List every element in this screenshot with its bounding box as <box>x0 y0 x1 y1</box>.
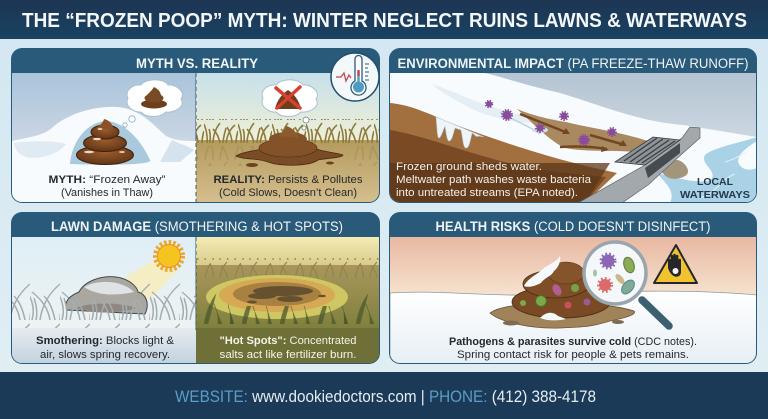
smothering caption: air, slows spring recovery. <box>40 349 170 361</box>
icon: smothering mound <box>66 277 147 314</box>
panel heading: ENVIRONMENTAL IMPACT (PA FREEZE-THAW RUNOFF) <box>398 56 749 71</box>
icon: burn patch <box>206 275 348 319</box>
winter sky <box>390 73 757 203</box>
panel: environmental impact <box>389 48 757 203</box>
reality caption: (Cold Slows, Doesn’t Clean) <box>219 187 357 199</box>
myth caption: MYTH: “Frozen Away” <box>48 174 166 186</box>
outflow from drain <box>662 160 688 179</box>
local waterways label <box>680 178 750 198</box>
local waterways label: WATERWAYS <box>680 189 750 201</box>
panel heading: LAWN DAMAGE (SMOTHERING & HOT SPOTS) <box>51 219 343 234</box>
soil caption: into untreated streams (EPA noted). <box>396 187 578 199</box>
snow ground <box>390 291 757 364</box>
local waterways label: LOCAL <box>697 176 734 188</box>
smothering scene <box>12 237 196 364</box>
icon: magnifying glass <box>584 242 669 326</box>
icon: contaminated poop <box>490 256 635 328</box>
soil caption: Frozen ground sheds water. <box>396 161 542 173</box>
dusk sky <box>390 237 757 297</box>
smothering caption: Smothering: Blocks light & <box>36 335 175 347</box>
soil caption <box>396 161 592 199</box>
reality caption: REALITY: Persists & Pollutes <box>214 174 363 186</box>
panel: lawn damage <box>11 212 380 364</box>
icon: warning hand <box>654 245 697 283</box>
soil caption: Meltwater path washes waste bacteria <box>396 174 592 186</box>
panel: health risks <box>389 212 757 364</box>
soil cross-section <box>390 103 617 203</box>
hot spots caption: "Hot Spots": Concentrated <box>220 335 356 347</box>
panel: myth vs reality <box>11 48 380 203</box>
panel heading: MYTH VS. REALITY <box>136 56 258 71</box>
myth scene <box>12 73 196 203</box>
smothering caption <box>36 335 175 361</box>
icon: large poop <box>76 119 134 164</box>
hot spots scene <box>196 237 380 364</box>
panel heading: HEALTH RISKS (COLD DOESN'T DISINFECT) <box>436 219 710 234</box>
footer banner <box>0 372 768 419</box>
icon: thermometer <box>331 53 379 101</box>
myth caption <box>48 174 166 199</box>
contact line: WEBSITE: www.dookiedoctors.com | PHONE: (412) 388-4178 <box>175 388 596 406</box>
reality caption <box>214 174 363 199</box>
hot spots caption <box>220 336 356 358</box>
icon: thought bubble with poop <box>123 80 182 127</box>
icon: sun <box>156 242 182 270</box>
reality scene <box>196 73 380 203</box>
hot spots caption: salts act like fertilizer burn. <box>220 349 356 361</box>
myth caption: (Vanishes in Thaw) <box>61 187 153 199</box>
snow slope <box>390 73 757 203</box>
health caption <box>449 336 697 361</box>
runoff path <box>500 109 648 152</box>
icon: thought bubble with crossed poop <box>262 80 317 130</box>
title banner <box>0 0 768 39</box>
storm drain <box>578 127 700 203</box>
health caption: Spring contact risk for people & pets remains. <box>457 349 689 361</box>
icon: melted poop <box>236 126 343 167</box>
title: THE “FROZEN POOP” MYTH: WINTER NEGLECT RUINS LAWNS & WATERWAYS <box>22 10 747 32</box>
water river <box>657 137 757 203</box>
health caption: Pathogens & parasites survive cold (CDC notes). <box>449 336 697 348</box>
bacteria <box>486 101 616 144</box>
icicles <box>436 117 484 148</box>
